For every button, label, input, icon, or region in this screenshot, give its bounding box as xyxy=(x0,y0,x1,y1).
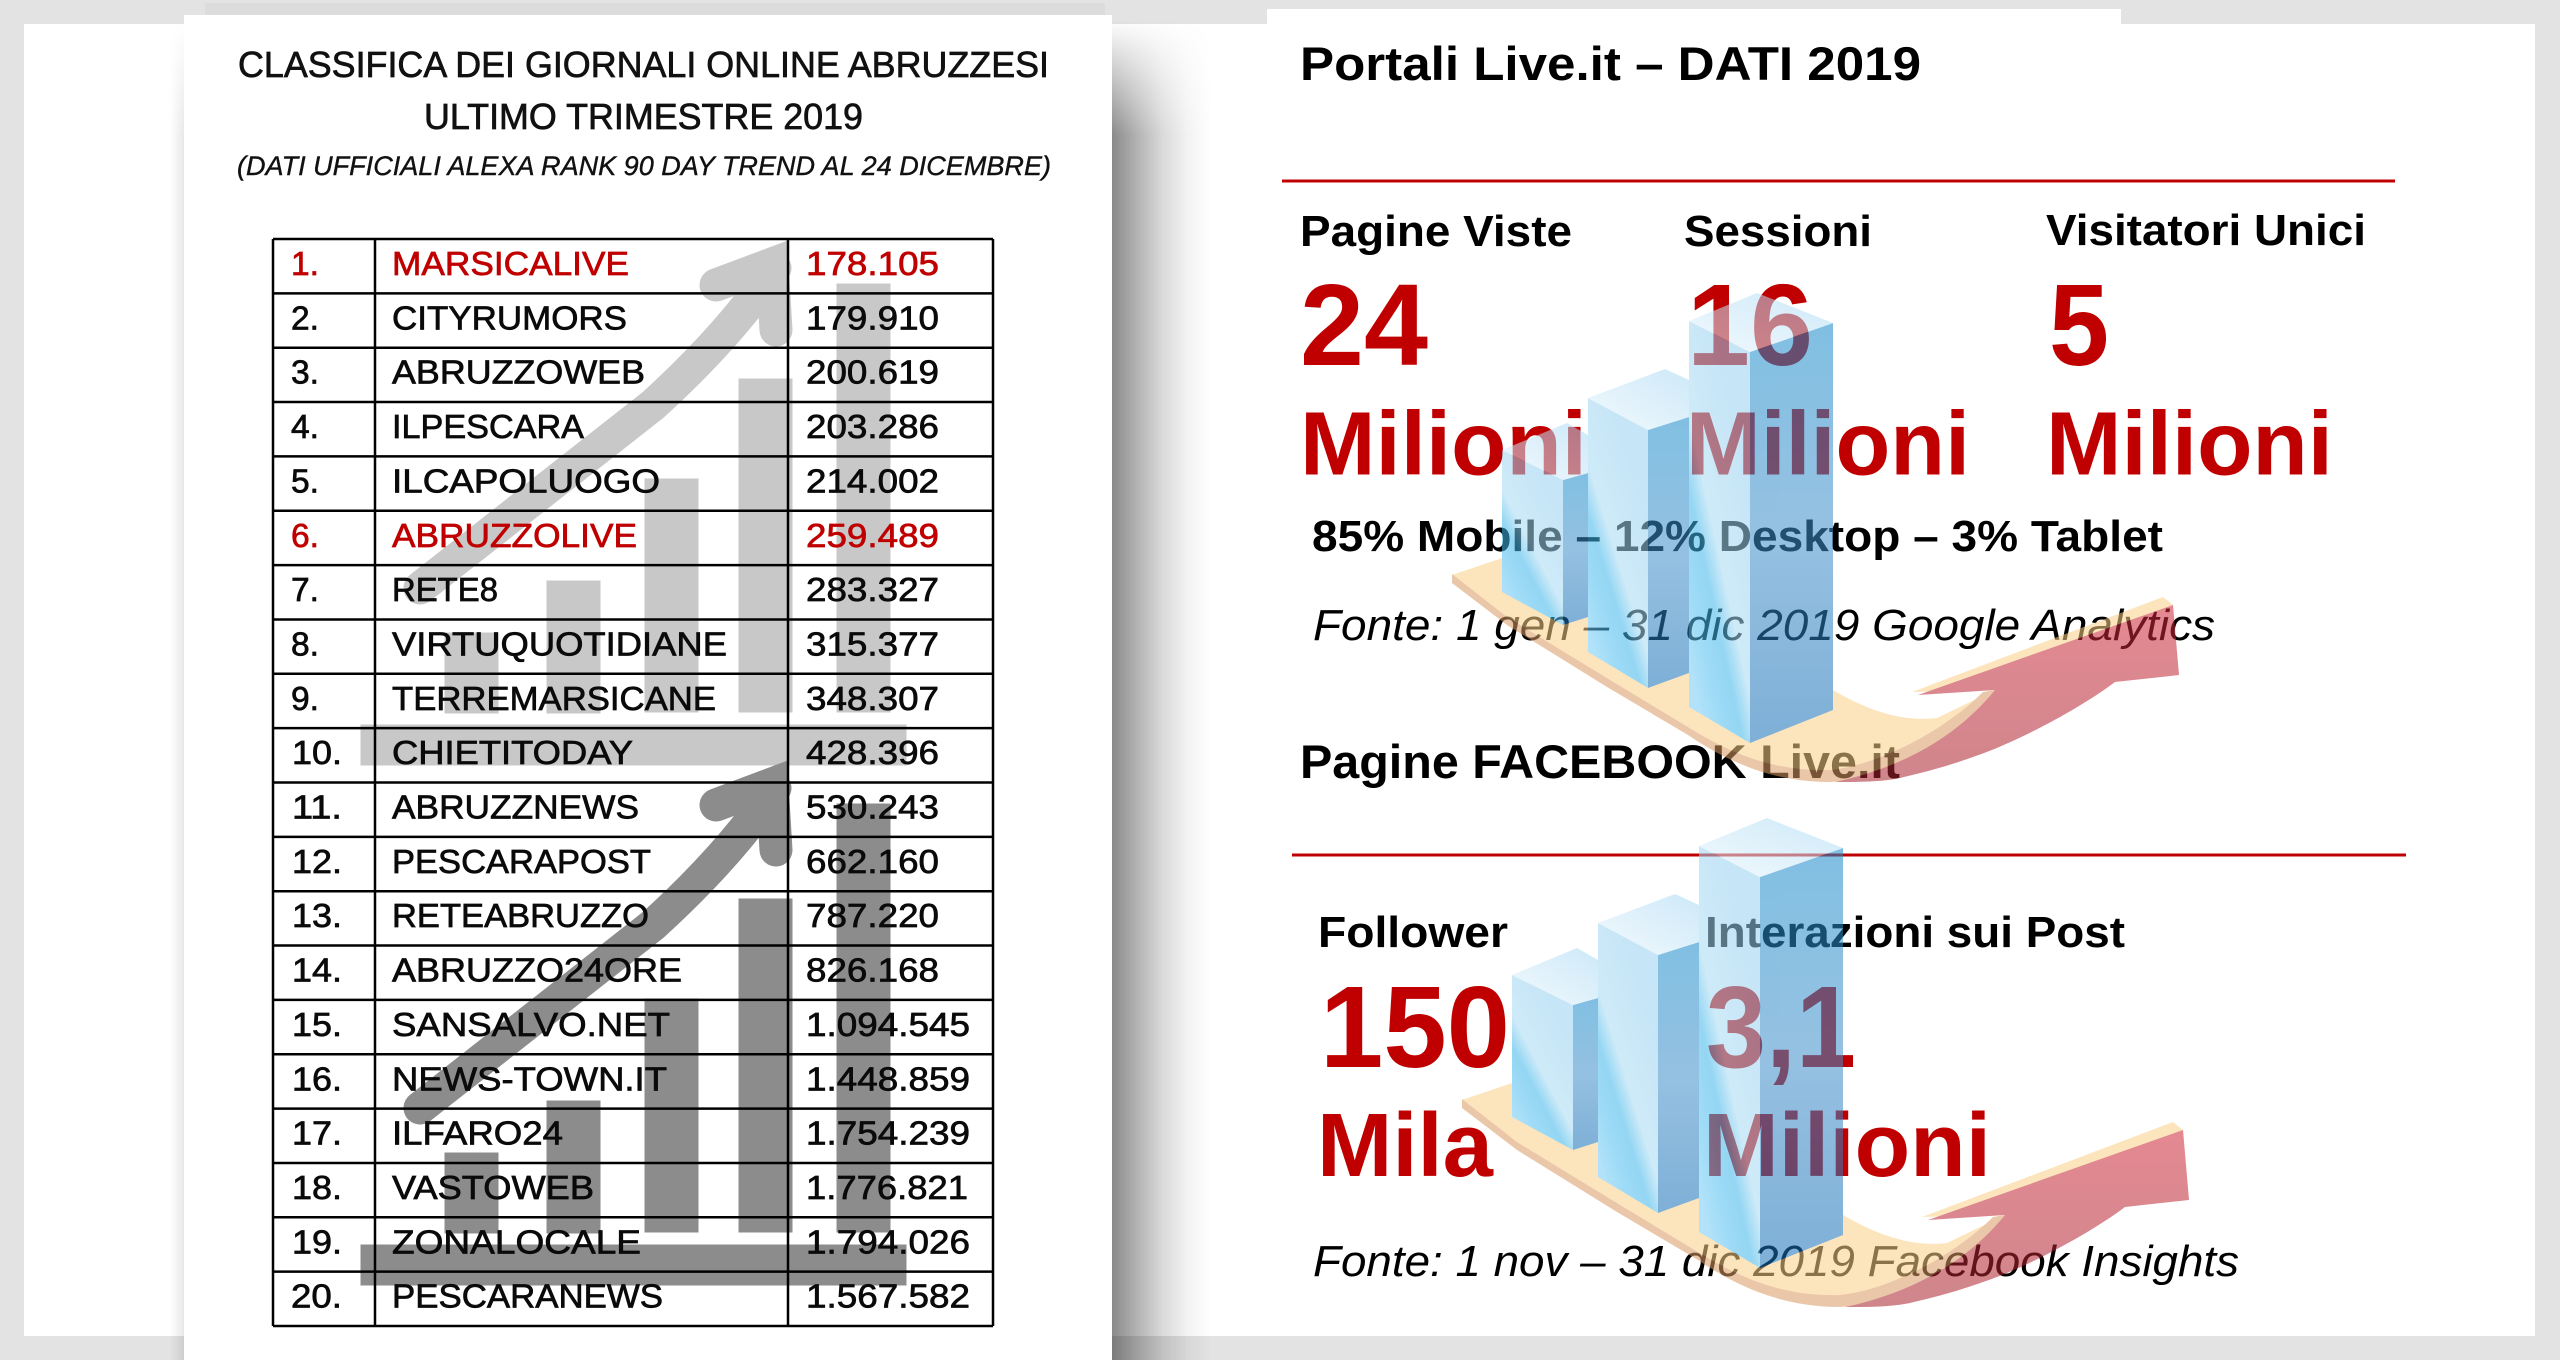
row 17 xyxy=(292,1115,970,1152)
row 14: 14. xyxy=(292,952,342,989)
row 20: PESCARANEWS xyxy=(392,1278,663,1315)
row 9: 9. xyxy=(291,680,319,717)
row 1 xyxy=(291,245,939,282)
row 19: 1.794.026 xyxy=(806,1223,970,1260)
row 2: 179.910 xyxy=(806,299,939,336)
row 10: CHIETITODAY xyxy=(392,734,633,771)
row 15 xyxy=(292,1006,970,1043)
stat: Pagine Viste xyxy=(1300,207,1587,494)
row 8: 8. xyxy=(291,626,319,662)
row 10: 428.396 xyxy=(806,734,939,771)
row 1: MARSICALIVE xyxy=(392,245,629,282)
row 7: 283.327 xyxy=(806,571,939,608)
row 16 xyxy=(292,1060,970,1097)
unit: Milioni xyxy=(1686,394,1970,494)
stat: Follower xyxy=(1317,908,1510,1196)
row 19 xyxy=(292,1223,970,1260)
row 4: 203.286 xyxy=(806,408,939,445)
row 14: ABRUZZO24ORE xyxy=(392,952,682,989)
row 16: 1.448.859 xyxy=(806,1060,970,1097)
row 14 xyxy=(292,952,939,989)
row 3: 200.619 xyxy=(806,354,939,391)
row 7 xyxy=(291,571,939,608)
heading: Pagine Facebook: Pagine FACEBOOK Live.it xyxy=(1300,735,1900,788)
row 16: NEWS-TOWN.IT xyxy=(392,1060,667,1097)
icon: 3D bar chart with rising arrow (bottom) xyxy=(1462,818,2189,1307)
stat: Interazioni sui Post xyxy=(1703,908,2125,1196)
unit: Milioni xyxy=(2046,394,2333,494)
row 20: 1.567.582 xyxy=(806,1278,970,1315)
value: 16 xyxy=(1687,260,1813,390)
value: 24 xyxy=(1300,260,1428,390)
row 13: RETEABRUZZO xyxy=(392,897,649,934)
row 12 xyxy=(292,843,939,880)
row 2: CITYRUMORS xyxy=(392,299,627,336)
row 17: ILFARO24 xyxy=(392,1115,563,1152)
row 15: SANSALVO.NET xyxy=(392,1006,670,1043)
row 18: 18. xyxy=(292,1169,342,1206)
unit: Mila xyxy=(1317,1096,1494,1196)
row 4: 4. xyxy=(291,408,319,445)
stat: Visitatori Unici xyxy=(2046,206,2366,494)
subtitle: data source: (DATI UFFICIALI ALEXA RANK 90 DAY TREND AL 24 DICEMBRE) xyxy=(237,151,1051,181)
row 3: 3. xyxy=(291,354,319,391)
row 11: 11. xyxy=(292,788,342,826)
row 20: 20. xyxy=(291,1278,342,1315)
row 2 xyxy=(291,299,939,336)
row 8: VIRTUQUOTIDIANE xyxy=(392,626,727,662)
row 14: 826.168 xyxy=(806,952,939,989)
row 4: ILPESCARA xyxy=(392,408,584,445)
row 12: 662.160 xyxy=(806,843,939,880)
title line 2: ULTIMO TRIMESTRE 2019 xyxy=(424,96,863,137)
row 2: 2. xyxy=(291,299,319,336)
source: Google Analytics: Fonte: 1 gen – 31 dic 2019 Google Analytics xyxy=(1313,601,2215,650)
source: Facebook Insights: Fonte: 1 nov – 31 dic 2019 Facebook Insights xyxy=(1313,1237,2239,1286)
row 15: 15. xyxy=(292,1006,342,1043)
row 5: ILCAPOLUOGO xyxy=(392,462,660,499)
row 11: ABRUZZNEWS xyxy=(392,788,639,826)
value: 3,1 xyxy=(1706,962,1856,1092)
row 6: 259.489 xyxy=(806,517,939,554)
row 13: 13. xyxy=(292,897,342,934)
device split: 85% Mobile – 12% Desktop – 3% Tablet xyxy=(1312,512,2163,561)
unit: Milioni xyxy=(1300,394,1587,494)
label: Interazioni sui Post xyxy=(1705,908,2125,957)
label: Visitatori Unici xyxy=(2046,206,2366,255)
row 18: 1.776.821 xyxy=(806,1169,968,1206)
row 3 xyxy=(291,354,939,391)
unit: Milioni xyxy=(1703,1096,1991,1196)
row 3: ABRUZZOWEB xyxy=(392,354,645,391)
row 18: VASTOWEB xyxy=(392,1169,594,1206)
row 7: 7. xyxy=(291,571,319,608)
row 17: 1.754.239 xyxy=(806,1115,970,1152)
label: Sessioni xyxy=(1684,207,1872,256)
row 1: 1. xyxy=(291,245,319,282)
row 6 xyxy=(291,517,939,554)
row 15: 1.094.545 xyxy=(806,1006,970,1043)
row 13 xyxy=(292,897,939,934)
paper drop shadow xyxy=(170,15,1212,1360)
row 9: TERREMARSICANE xyxy=(392,680,716,717)
row 16: 16. xyxy=(292,1060,342,1097)
row 4 xyxy=(291,408,939,445)
value: 150 xyxy=(1320,962,1510,1092)
row 19: ZONALOCALE xyxy=(392,1223,641,1260)
row 8: 315.377 xyxy=(806,626,939,662)
icon: 3D bar chart with rising arrow (top) xyxy=(1452,293,2179,782)
panel: ranking paper sheet xyxy=(184,15,1112,1360)
dark watermark: rising bar chart xyxy=(361,784,906,1285)
row 17: 17. xyxy=(292,1115,342,1152)
row 19: 19. xyxy=(292,1223,342,1260)
row 11: 530.243 xyxy=(806,788,939,826)
label: Pagine Viste xyxy=(1300,207,1572,256)
row 13: 787.220 xyxy=(806,897,939,934)
table grid xyxy=(273,239,993,1326)
row 8 xyxy=(291,626,939,662)
row 10 xyxy=(292,734,939,771)
ranking table xyxy=(273,239,993,1326)
row 9 xyxy=(291,680,939,717)
row 9: 348.307 xyxy=(806,680,939,717)
light watermark: rising bar chart xyxy=(361,264,906,765)
row 6: ABRUZZOLIVE xyxy=(392,517,637,554)
row 5: 214.002 xyxy=(806,462,939,499)
row 5 xyxy=(291,462,939,499)
row 1: 178.105 xyxy=(806,245,939,282)
row 18 xyxy=(292,1169,968,1206)
row 20 xyxy=(291,1278,970,1315)
row 6: 6. xyxy=(291,517,319,554)
stat: Sessioni xyxy=(1684,207,1970,494)
title: ranking heading xyxy=(237,44,1051,181)
row 5: 5. xyxy=(291,462,319,499)
shadow band above paper xyxy=(205,3,1105,16)
row 12: PESCARAPOST xyxy=(392,843,651,880)
heading: Portali Live.it: Portali Live.it – DATI 2019 xyxy=(1300,37,1921,90)
top white strip of right slide xyxy=(1267,9,2121,25)
row 7: RETE8 xyxy=(392,571,498,608)
row 11 xyxy=(292,788,939,826)
title line 1: CLASSIFICA DEI GIORNALI ONLINE ABRUZZESI xyxy=(238,44,1049,85)
row 12: 12. xyxy=(292,843,342,880)
label: Follower xyxy=(1318,908,1508,957)
row 10: 10. xyxy=(292,734,342,771)
value: 5 xyxy=(2049,260,2109,390)
